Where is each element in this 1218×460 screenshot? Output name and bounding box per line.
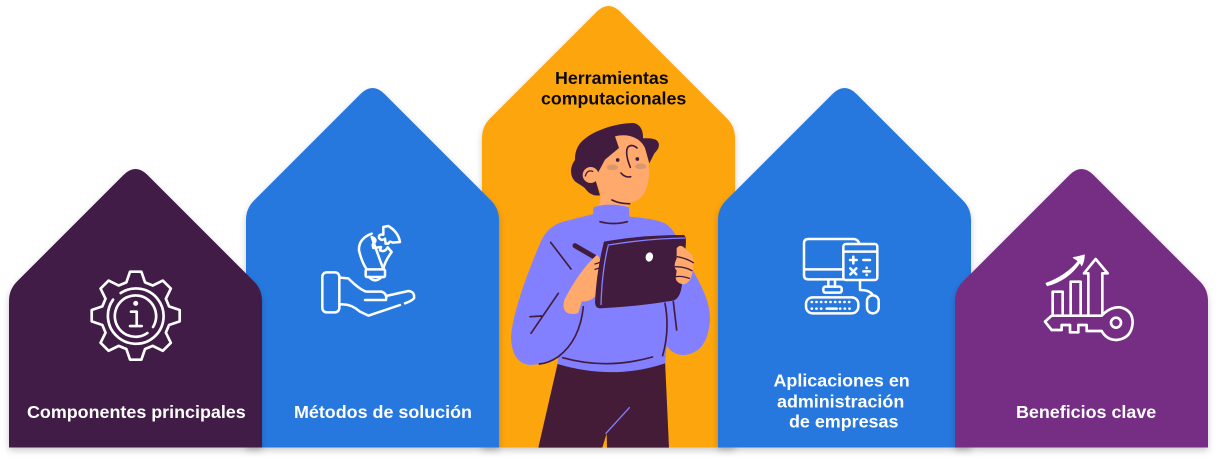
facial features: [600, 145, 646, 223]
icon: gear with information symbol: [92, 272, 180, 360]
illustration: person with tablet: [511, 123, 710, 448]
panel: Herramientas computacionales: [482, 6, 735, 448]
label: Aplicaciones en administración de empresas: de empresas: [789, 412, 898, 432]
face and neck: [595, 135, 649, 208]
tablet: [595, 235, 686, 308]
icon: hand holding light bulb with puzzle piece: [322, 226, 414, 316]
label: Componentes principales: Componentes principales: [27, 402, 246, 422]
sweater folds: [530, 242, 677, 364]
left hand: [563, 255, 601, 314]
panel: Métodos de solución: [246, 88, 499, 448]
panel: Aplicaciones en administración de empresas: [718, 88, 971, 448]
hand: [322, 272, 414, 316]
trousers: [538, 360, 669, 448]
icon: computer with calculator: [804, 239, 879, 313]
stylus: [575, 246, 595, 257]
icon: key with growth chart: [1045, 255, 1133, 340]
trouser crease: [606, 408, 629, 433]
label: Métodos de solución: Métodos de solución: [294, 402, 472, 422]
sweater: [511, 205, 710, 372]
label: Aplicaciones en administración de empresas: administración: [777, 392, 904, 412]
ear: [583, 167, 599, 183]
bulb and puzzle piece: [359, 226, 400, 280]
heading: Herramientas computacionales: computacionales: [541, 88, 686, 108]
label: Beneficios clave: Beneficios clave: [1016, 402, 1156, 422]
heading: Herramientas computacionales: Herramientas: [555, 68, 669, 88]
label: Aplicaciones en administración de empresas: Aplicaciones en: [774, 371, 910, 391]
right hand: [595, 246, 694, 284]
panel: Componentes principales: [9, 169, 262, 448]
hair: [571, 123, 659, 196]
panel: Beneficios clave: [955, 169, 1208, 448]
